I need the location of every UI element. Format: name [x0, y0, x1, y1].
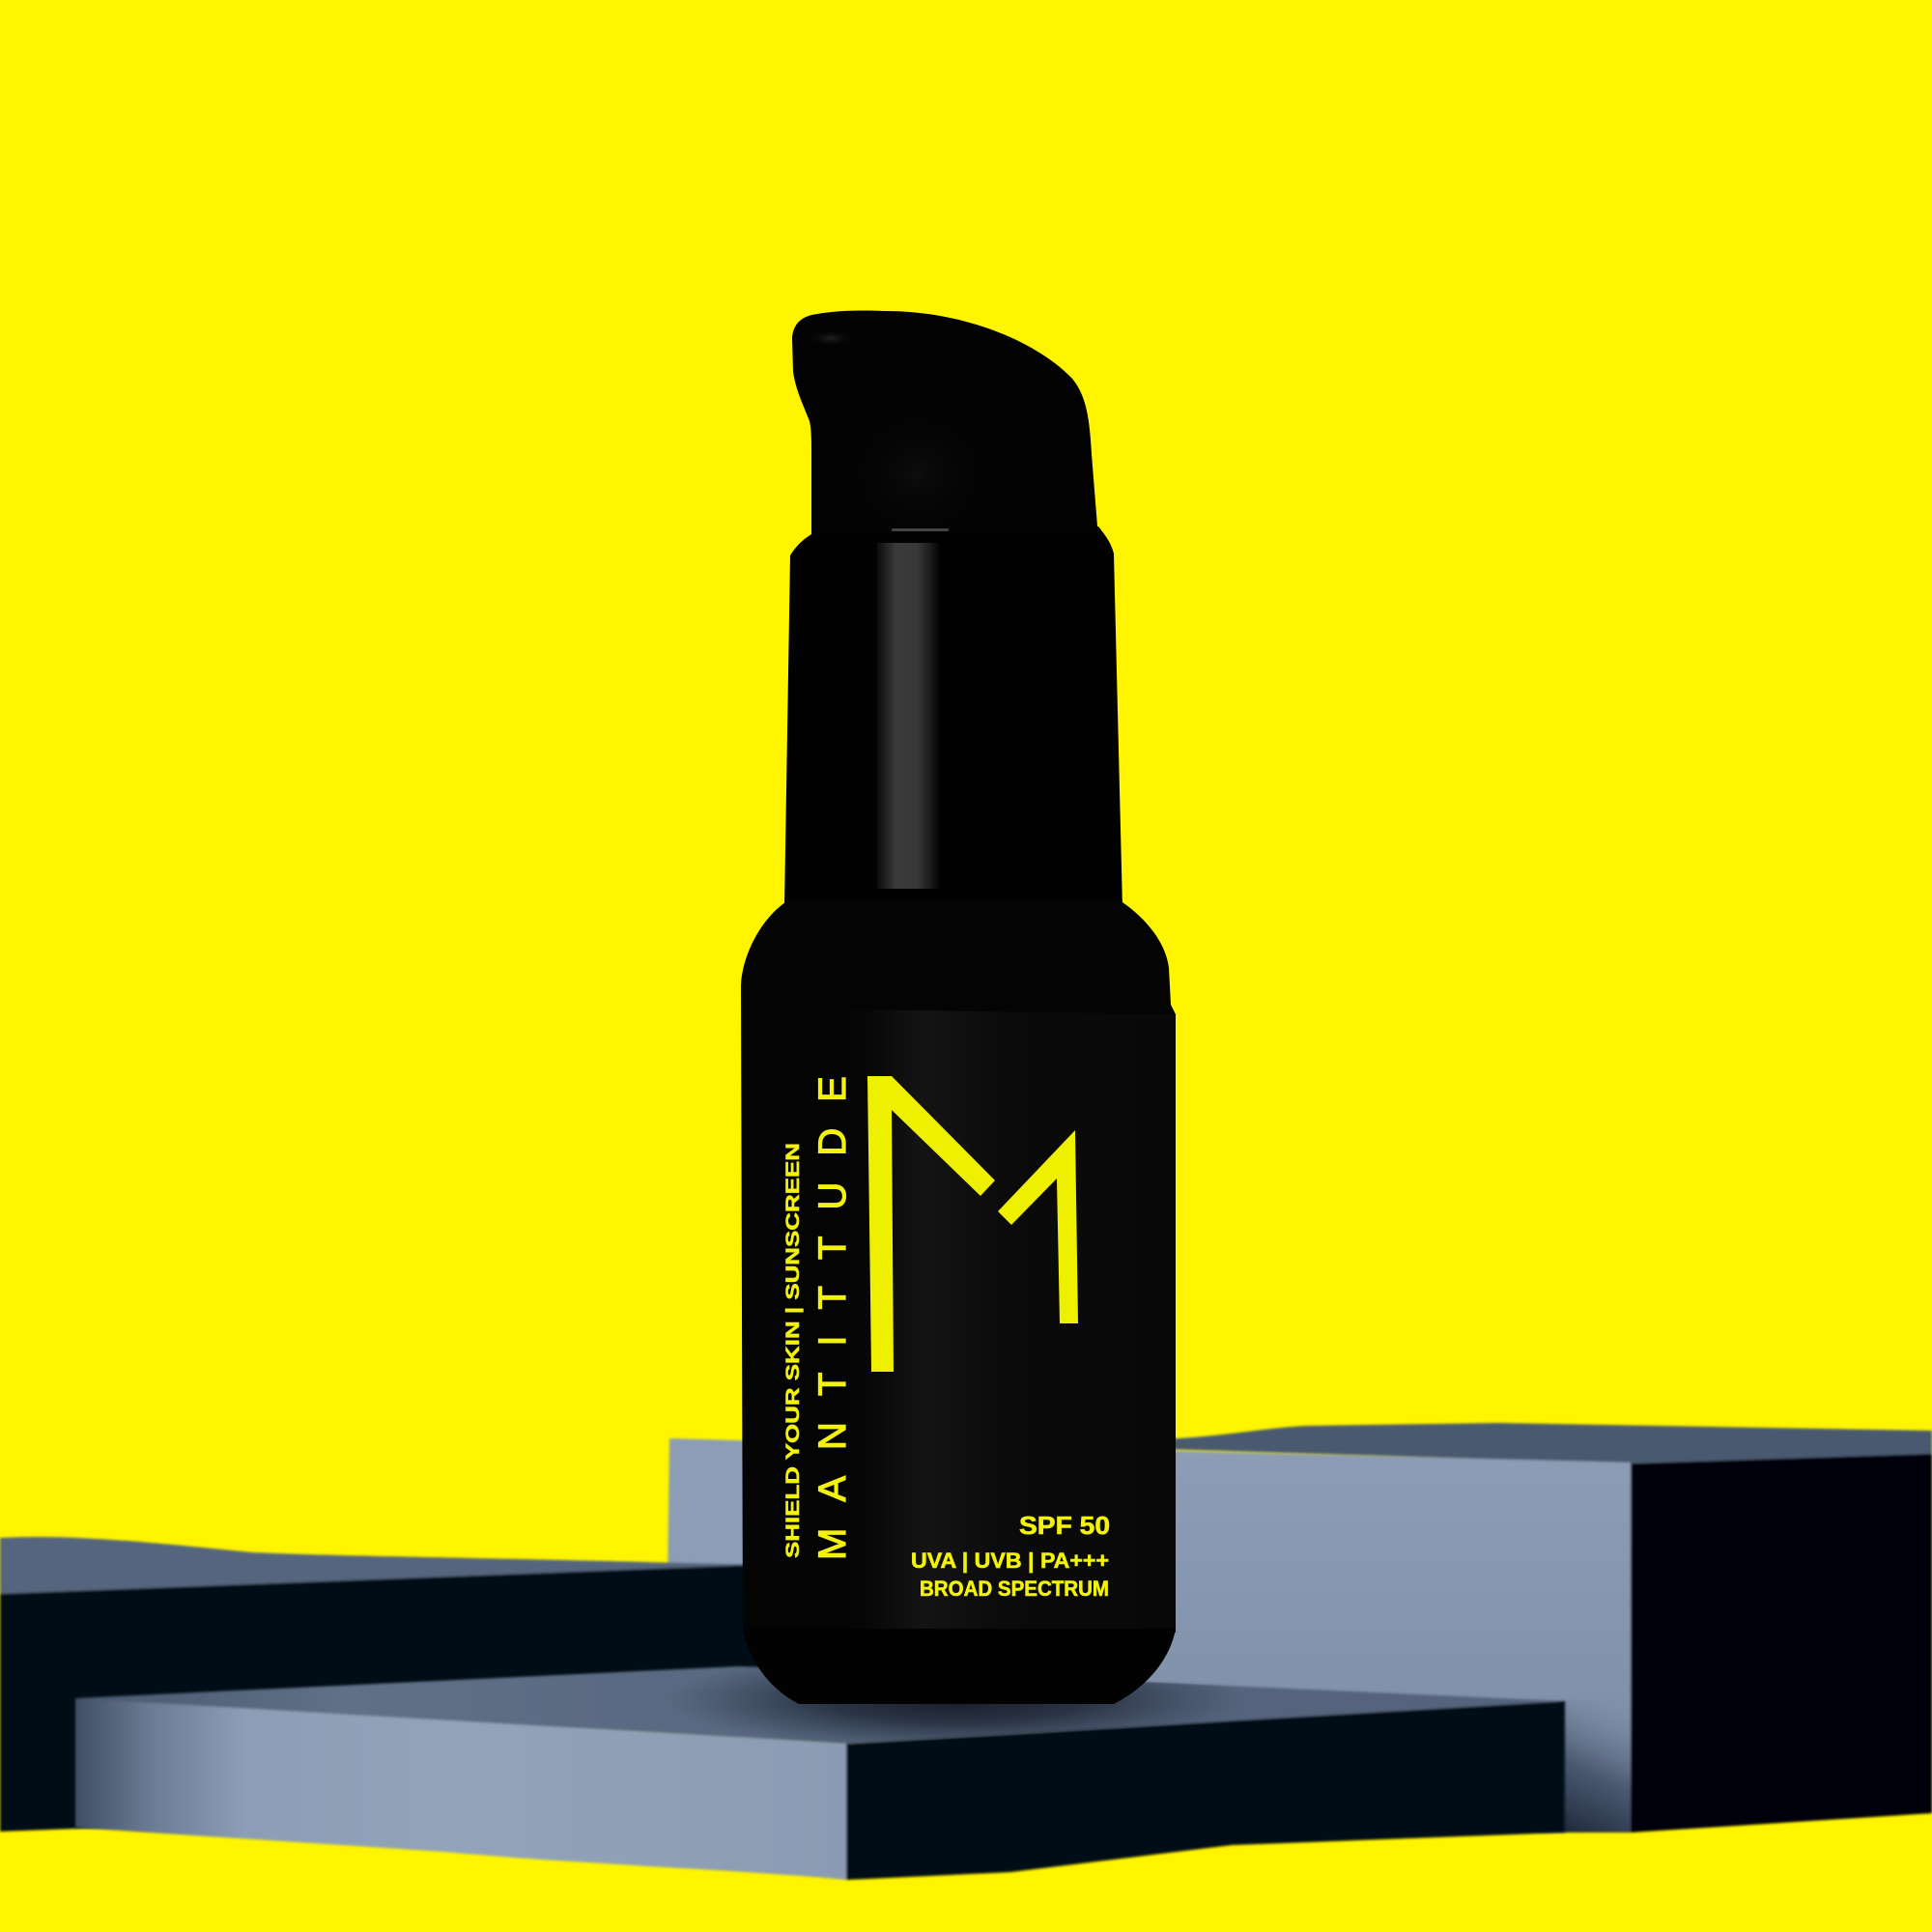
pedestal right face [846, 1701, 1565, 1880]
pedestal top face [75, 1666, 1565, 1744]
collar highlight [877, 543, 939, 889]
display blocks [0, 1423, 1932, 1880]
tagline: SHIELD YOUR SKIN | SUNSCREEN [783, 1143, 804, 1558]
bottle collar [784, 526, 1122, 908]
block: back tower behind bottle [668, 1438, 773, 1584]
protection line: UVA | UVB | PA+++ [911, 1548, 1109, 1573]
bottle contact shadow [695, 1670, 1217, 1741]
block: left back block [0, 1537, 773, 1832]
broad spectrum line: BROAD SPECTRUM [920, 1577, 1109, 1601]
brand name: MANTITTUDE [811, 1076, 854, 1560]
bottle pump head [792, 310, 1098, 541]
pedestal left face [75, 1698, 846, 1880]
block: front pedestal [75, 1666, 1565, 1880]
block: right tall block [1063, 1423, 1932, 1833]
SPF rating: SPF 50 [1019, 1511, 1110, 1540]
logo: M mark [867, 1076, 1078, 1372]
bottle base [743, 1629, 1176, 1704]
sunscreen bottle [741, 310, 1176, 1704]
bottle body [741, 902, 1176, 1704]
bottle label [850, 1009, 1176, 1629]
